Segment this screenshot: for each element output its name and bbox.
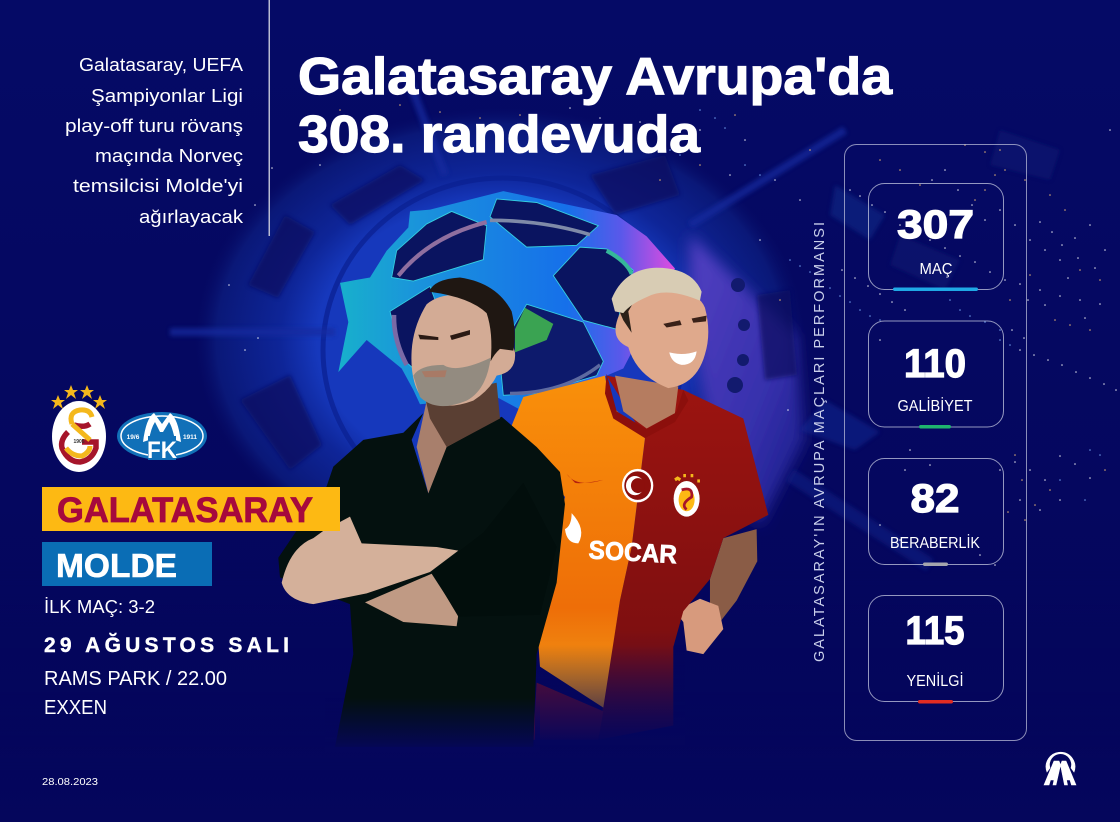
stat: losses bbox=[868, 596, 1004, 704]
stand blocks bbox=[240, 155, 797, 470]
icon: Galatasaray crest: 1905 bbox=[73, 439, 85, 445]
icon: Anadolu Agency logo bbox=[1044, 752, 1076, 785]
icon: Molde crest bbox=[117, 412, 207, 464]
stat: matches: MAÇ bbox=[920, 261, 952, 278]
banner: Molde bbox=[42, 542, 212, 586]
stadium disk bbox=[170, 70, 845, 572]
stat: wins: 110 bbox=[904, 342, 966, 386]
stat: matches bbox=[868, 184, 1004, 291]
stat: draws: BERABERLİK bbox=[890, 534, 981, 552]
coach bottom fade bbox=[325, 698, 540, 752]
Champions League starball bbox=[338, 191, 675, 411]
icon: Turkish crescent badge bbox=[622, 469, 653, 502]
club crests bbox=[51, 385, 207, 472]
stat: draws: 82 bbox=[910, 477, 960, 521]
icon: club badge on jersey bbox=[674, 476, 700, 517]
intro text: play-off turu rövanş bbox=[65, 116, 243, 136]
match details: EXXEN bbox=[44, 697, 107, 719]
banner: Galatasaray: GALATASARAY bbox=[57, 491, 313, 530]
vertical caption: GALATASARAY'IN AVRUPA MAÇLARI PERFORMANSI bbox=[812, 222, 828, 662]
icon: neck and face bbox=[612, 268, 708, 428]
icon: trees on the plaza bbox=[715, 278, 750, 427]
match details: İLK MAÇ: 3-2 bbox=[44, 597, 155, 617]
stat: losses: YENİLGİ bbox=[906, 672, 964, 690]
coach in black shirt bbox=[278, 277, 565, 747]
title: Galatasaray Avrupa'da bbox=[298, 48, 893, 106]
stat: matches: 307 bbox=[897, 203, 974, 247]
title bbox=[298, 48, 893, 164]
stat: wins: GALİBİYET bbox=[898, 397, 973, 415]
icon: Molde crest: 19/6 bbox=[127, 434, 140, 441]
icon: neck and chest bbox=[417, 393, 500, 493]
stat: wins bbox=[868, 321, 1004, 428]
date: 28.08.2023 bbox=[42, 776, 98, 788]
banner: Molde: MOLDE bbox=[56, 547, 177, 584]
jersey bbox=[512, 374, 768, 740]
intro text: Galatasaray, UEFA bbox=[79, 55, 243, 75]
match details bbox=[44, 597, 289, 719]
stat: losses: 115 bbox=[906, 609, 964, 653]
icon: Molde crest: 1911 bbox=[183, 434, 197, 441]
match details: RAMS PARK / 22.00 bbox=[44, 668, 227, 690]
icon: shirt bbox=[278, 413, 565, 747]
title: 308. randevuda bbox=[298, 106, 701, 164]
intro divider bbox=[268, 0, 270, 236]
intro text: temsilcisi Molde'yi bbox=[73, 176, 243, 196]
intro text bbox=[65, 55, 244, 227]
panel: European performance bbox=[844, 144, 1026, 740]
intro text: maçında Norveç bbox=[95, 146, 243, 166]
icon: Molde crest: FK bbox=[147, 437, 178, 464]
icon: skin arm and fist bbox=[675, 529, 757, 654]
player bottom fade bbox=[535, 645, 685, 745]
icon: head bbox=[411, 277, 515, 447]
icon: crossed forearms bbox=[282, 483, 557, 626]
player: striker in Galatasaray jersey bbox=[512, 268, 768, 740]
stat: draws bbox=[868, 458, 1004, 566]
intro text: ağırlayacak bbox=[139, 207, 244, 227]
match details: 29 AĞUSTOS SALI bbox=[44, 633, 289, 657]
city blocks and roads bbox=[790, 130, 1060, 565]
city lights bbox=[229, 105, 1116, 565]
icon: Galatasaray crest bbox=[51, 385, 107, 472]
intro text: Şampiyonlar Ligi bbox=[91, 86, 243, 106]
jersey: SOCAR bbox=[588, 536, 678, 570]
